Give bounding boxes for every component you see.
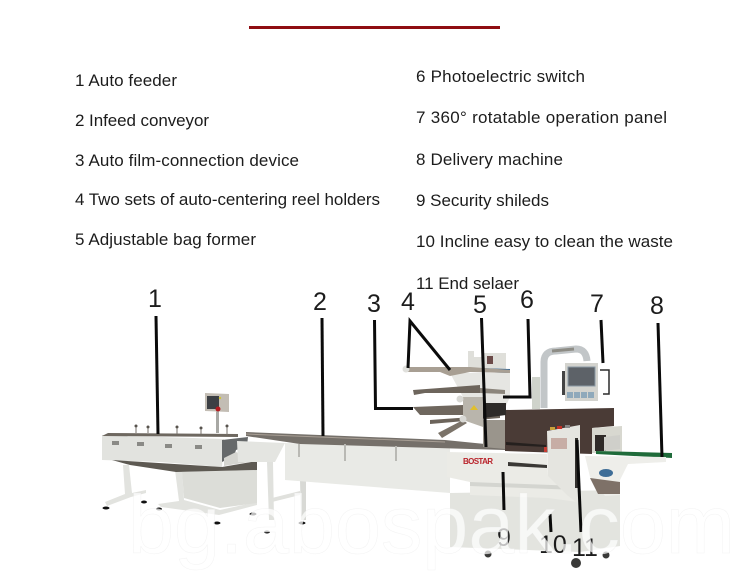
watermark: bg.abospak.com: [128, 478, 735, 571]
callout numbers: 4: [401, 288, 415, 316]
callout numbers: 9: [497, 524, 511, 552]
operation panel: [562, 363, 609, 401]
callout numbers: 10: [539, 531, 567, 559]
parts list: right column: 11 End selaer: [416, 274, 519, 293]
parts list: right column: 6 Photoelectric switch: [416, 67, 585, 86]
callout numbers: 7: [590, 290, 604, 318]
sealing housing: [505, 408, 614, 454]
machine illustration: [102, 349, 672, 568]
main body with logo: [447, 452, 578, 502]
leader lines: [156, 316, 662, 532]
infeed conveyor: [237, 432, 505, 520]
callout numbers: 11: [572, 534, 598, 562]
callout numbers: 8: [650, 292, 664, 320]
control tower: [547, 425, 580, 505]
film reels and forming unit: [402, 351, 540, 449]
parts list: right column: 9 Security shileds: [416, 191, 549, 210]
parts list: left column: 2 Infeed conveyor: [75, 111, 209, 130]
callout numbers: 1: [148, 285, 162, 313]
callout numbers: 5: [473, 291, 487, 319]
parts list: left column: 4 Two sets of auto-centering reel holders: [75, 190, 380, 209]
callout numbers: 6: [520, 286, 534, 314]
parts list: left column: 5 Adjustable bag former: [75, 230, 256, 249]
callout numbers: [148, 285, 664, 562]
parts list: left column: 1 Auto feeder: [75, 71, 177, 90]
parts list: right column: 10 Incline easy to clean the waste: [416, 232, 673, 251]
parts list: right column: 7 360° rotatable operation panel: [416, 108, 667, 127]
parts list: right column: 8 Delivery machine: [416, 150, 563, 169]
callout numbers: 3: [367, 290, 381, 318]
auto feeder unit: [102, 411, 306, 534]
casters: [484, 550, 610, 568]
parts list: left column: 3 Auto film-connection device: [75, 151, 299, 170]
logo text: BOSTAR: [463, 457, 493, 466]
parts list: left column: [75, 71, 380, 249]
delivery conveyor: [585, 426, 672, 496]
title rule: [249, 26, 500, 29]
feeder control box: [205, 393, 229, 412]
callout numbers: 2: [313, 288, 327, 316]
parts list: right column: [416, 67, 673, 293]
panel arm pipe: [544, 349, 587, 408]
base cabinet: [450, 490, 620, 552]
